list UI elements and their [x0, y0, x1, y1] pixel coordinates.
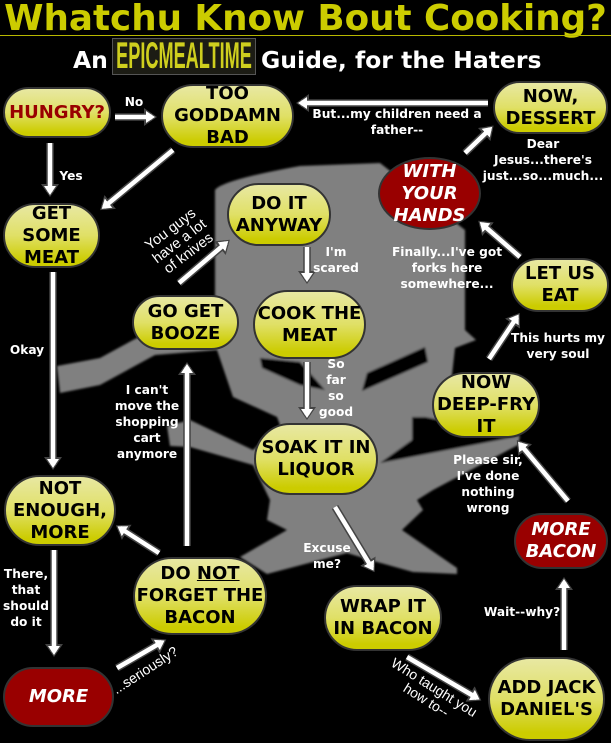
node: let us eat: EAT [541, 285, 579, 306]
label: shopping cart: shopping [115, 415, 179, 429]
label: dear jesus: Dear [527, 137, 559, 151]
label: wait why: Wait--why? [484, 605, 560, 619]
label: so far so good: good [319, 405, 353, 419]
label: so far so good: far [326, 373, 346, 387]
label: scared [313, 245, 359, 275]
node: more bacon: BACON [526, 541, 596, 562]
label: shopping cart: cart [133, 431, 161, 445]
label: knives: You guys [142, 205, 199, 254]
node: with your hands: YOUR [401, 182, 458, 204]
subtitle: An [73, 46, 108, 74]
label: forks [392, 245, 502, 291]
label: very soul: very soul [527, 347, 589, 361]
node: wrap it in bacon: IN BACON [333, 618, 433, 639]
node: cook the meat: MEAT [282, 324, 337, 346]
title rule [0, 35, 611, 36]
node: get some meat: MEAT [24, 246, 79, 268]
label: forks: somewhere... [401, 277, 493, 291]
label: no: No [125, 95, 143, 109]
label: dear jesus: just...so...much... [483, 169, 603, 183]
label: yes: Yes [59, 169, 83, 183]
node: go get booze: GO GET [148, 300, 223, 322]
label: scared: I'm [326, 245, 346, 259]
node: add jack daniel's: DANIEL'S [500, 699, 593, 720]
label: so far so good [319, 357, 353, 419]
label: who taught you: how to-- [401, 680, 452, 720]
label: please sir: I've done [457, 469, 519, 483]
node: add jack daniel's [488, 657, 605, 741]
node: do not forget the bacon: BACON [164, 607, 236, 628]
label: shopping cart: move the [115, 399, 179, 413]
label: excuse me: me? [313, 557, 341, 571]
node: do it anyway: DO IT [251, 192, 307, 214]
label: my children: But...my children need a [312, 107, 482, 121]
label: shopping cart [115, 383, 179, 461]
node: now deep-fry it: NOW [461, 372, 511, 393]
node: let us eat [511, 258, 609, 312]
node: get some meat [3, 203, 100, 268]
node: more bacon: MORE [531, 519, 591, 540]
node: too goddamn bad: TOO [206, 83, 249, 104]
node: too goddamn bad: BAD [206, 127, 249, 148]
label: scared: scared [313, 261, 359, 275]
node: soak it in liquor: LIQUOR [277, 459, 355, 480]
node: soak it in liquor [254, 423, 378, 495]
node: cook the meat [253, 290, 366, 359]
node: now deep-fry it: IT [476, 416, 495, 437]
node: go get booze: BOOZE [151, 322, 220, 344]
node: too goddamn bad [161, 84, 294, 148]
node: now deep-fry it [432, 372, 540, 438]
bottom edge [0, 743, 611, 746]
node: not enough, more: MORE [30, 522, 90, 542]
node: not enough, more: ENOUGH, [13, 500, 107, 520]
label: there that should do it: There, [4, 567, 48, 581]
label: my children [312, 107, 482, 137]
label: dear jesus: Jesus...there's [494, 153, 592, 167]
label: please sir: nothing [461, 485, 515, 499]
node: with your hands [378, 157, 481, 230]
node: not enough, more [4, 475, 116, 546]
node: too goddamn bad: GODDAMN [174, 105, 281, 126]
subtitle [73, 38, 541, 75]
node: hungry: HUNGRY? [9, 102, 105, 122]
label: okay: Okay [10, 343, 44, 357]
node: with your hands: HANDS [394, 204, 465, 226]
label: seriously: ...seriously? [109, 643, 181, 697]
label: shopping cart: anymore [117, 447, 177, 461]
label: please sir [453, 453, 523, 515]
label: my children: father-- [371, 123, 423, 137]
node: let us eat: LET US [525, 263, 595, 284]
node: more [3, 667, 114, 727]
label: excuse me [303, 541, 351, 571]
label: dear jesus [482, 137, 603, 183]
node: not enough, more: NOT [39, 478, 81, 498]
node: more: MORE [29, 686, 88, 707]
node: now, dessert [493, 81, 608, 134]
node: add jack daniel's: ADD JACK [498, 677, 595, 698]
label: please sir: wrong [466, 501, 510, 515]
node: hungry [3, 87, 111, 138]
node: get some meat: GET [32, 202, 71, 224]
node: do not forget the bacon: FORGET THE [137, 585, 263, 606]
label: shopping cart: I can't [126, 383, 168, 397]
label: there that should do it: do it [10, 615, 42, 629]
node: soak it in liquor: SOAK IT IN [262, 437, 370, 458]
label: very soul [511, 331, 605, 361]
node: now deep-fry it: DEEP-FRY [437, 394, 535, 415]
label: knives: have a lot [150, 216, 210, 267]
node: cook the meat: COOK THE [258, 302, 361, 324]
label: who taught you: Who taught you [388, 654, 480, 720]
label: so far so good: so [328, 389, 344, 403]
label: forks: Finally...I've got [392, 245, 502, 259]
label: very soul: This hurts my [511, 331, 605, 345]
label: knives: of knives [161, 230, 216, 277]
label: so far so good: So [327, 357, 345, 371]
node: now, dessert: DESSERT [506, 108, 595, 128]
label: knives [142, 205, 216, 277]
label: there that should do it [3, 567, 49, 629]
node: do it anyway: ANYWAY [236, 214, 322, 236]
node: do not forget the bacon [133, 557, 267, 635]
node: wrap it in bacon: WRAP IT [340, 596, 426, 617]
label: excuse me: Excuse [303, 541, 351, 555]
label: there that should do it: that [12, 583, 40, 597]
node: with your hands: WITH [403, 160, 456, 182]
node: go get booze [132, 295, 239, 350]
node: do it anyway [227, 183, 331, 246]
node: do not forget the bacon: DO NOT [160, 563, 240, 584]
node: now, dessert: NOW, [523, 86, 578, 106]
subtitle: Guide, for the Haters [261, 46, 541, 74]
node: wrap it in bacon [324, 585, 442, 651]
label: forks: forks here [412, 261, 482, 275]
label: there that should do it: should [3, 599, 49, 613]
node: more bacon [514, 513, 608, 569]
node: get some meat: SOME [22, 224, 81, 246]
label: please sir: Please sir, [453, 453, 523, 467]
